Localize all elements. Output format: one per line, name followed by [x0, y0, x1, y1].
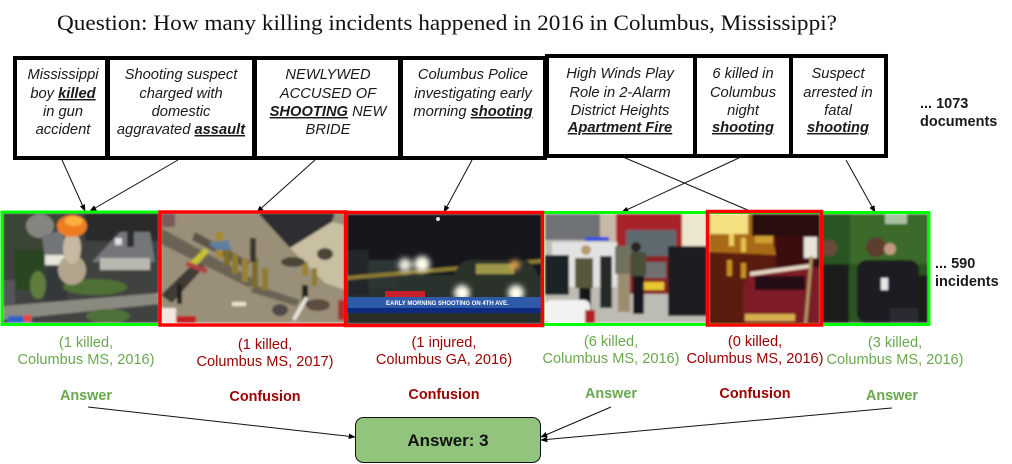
document box 2: domestic [152, 104, 211, 120]
document box 5: Apartment Fire [567, 120, 672, 136]
caption incident 2 [196, 337, 334, 370]
incident photo 1: house fire [3, 213, 159, 323]
document box 2 [108, 58, 254, 158]
document box 6: night [727, 103, 760, 119]
caption incident 5: (0 killed, [728, 334, 782, 350]
document box 7: shooting [807, 120, 869, 136]
caption incident 2: Columbus MS, 2017) [196, 354, 334, 370]
caption incident 2: (1 killed, [238, 337, 292, 353]
document box 3 [255, 58, 400, 158]
caption incident 1: Columbus MS, 2016) [17, 352, 155, 368]
caption incident 1 [17, 335, 155, 368]
document box 2: charged with [139, 86, 223, 102]
caption incident 5 [686, 334, 824, 367]
document box 7: arrested in [803, 85, 873, 101]
caption incident 3: (1 injured, [412, 335, 476, 351]
caption incident 6: (3 killed, [868, 335, 922, 351]
green incident frames [2, 212, 929, 324]
verdict labels: Confusion [408, 387, 480, 403]
arrows to answer box [88, 407, 892, 440]
document box 1: accident [36, 122, 91, 138]
documents count label: documents [920, 114, 997, 130]
document box 7 [791, 56, 886, 156]
document box 1 [15, 58, 107, 158]
incidents count label [935, 256, 999, 290]
incidents count label: ... 590 [935, 256, 975, 272]
incident photo 4: police and fire truck [545, 214, 707, 323]
document box 6 [695, 56, 791, 156]
red incident frames [160, 212, 822, 326]
document box 6: 6 killed in [712, 66, 774, 82]
document box 2: Shooting suspect [125, 67, 238, 83]
title: Question: How many killing incidents happened in 2016 in Columbus, Mississippi? [57, 10, 837, 35]
caption incident 4 [542, 334, 680, 367]
incident photo 6: police officers [821, 214, 928, 323]
document box 7: fatal [824, 103, 853, 119]
incident photo 5: burning building with fire truck [709, 214, 820, 324]
verdict labels: Confusion [719, 386, 791, 402]
caption incident 4: Columbus MS, 2016) [542, 351, 680, 367]
document box 1: in gun [43, 104, 83, 120]
verdict labels: Answer [585, 386, 637, 402]
document box 4: investigating early [414, 86, 533, 102]
verdict labels: Confusion [229, 389, 301, 405]
document box 7: Suspect [811, 66, 865, 82]
caption incident 5: Columbus MS, 2016) [686, 351, 824, 367]
document box 3: ACCUSED OF [279, 86, 377, 102]
document box 2: aggravated assault [117, 122, 246, 138]
caption incident 3: Columbus GA, 2016) [376, 352, 512, 368]
document box 5: High Winds Play [566, 66, 675, 82]
verdict labels [60, 386, 918, 405]
document box 3: NEWLYWED [285, 67, 371, 83]
document box 6: Columbus [710, 85, 777, 101]
caption incident 1: (1 killed, [59, 335, 113, 351]
connector lines from documents to incidents [62, 157, 875, 212]
document box 6: shooting [712, 120, 774, 136]
documents count label: ... 1073 [920, 96, 968, 112]
document box 5: District Heights [571, 103, 670, 119]
incident photo 2: crowd on street [161, 213, 345, 323]
verdict labels: Answer [866, 388, 918, 404]
document box 1: Mississippi [28, 67, 99, 83]
document box 4: Columbus Police [418, 67, 528, 83]
incidents count label: incidents [935, 274, 999, 290]
document box 1: boy killed [30, 86, 97, 102]
document box 4: morning shooting [413, 104, 533, 120]
document box 3: SHOOTING NEW [270, 104, 388, 120]
answer box: Answer: 3 [407, 431, 489, 450]
document box 5 [547, 56, 695, 156]
caption incident 6 [826, 335, 964, 368]
caption incident 4: (6 killed, [584, 334, 638, 350]
incident photo 3: night news broadcast [347, 214, 542, 324]
verdict labels: Answer [60, 388, 112, 404]
incident photo 3: night news broadcast: EARLY MORNING SHOOTING ON 4TH AVE. [386, 301, 509, 307]
caption incident 3 [376, 335, 512, 368]
answer box [356, 418, 540, 462]
document box 4 [401, 58, 545, 158]
documents count label [920, 96, 997, 130]
document box 3: BRIDE [306, 122, 351, 138]
caption incident 6: Columbus MS, 2016) [826, 352, 964, 368]
document box 5: Role in 2-Alarm [569, 85, 671, 101]
